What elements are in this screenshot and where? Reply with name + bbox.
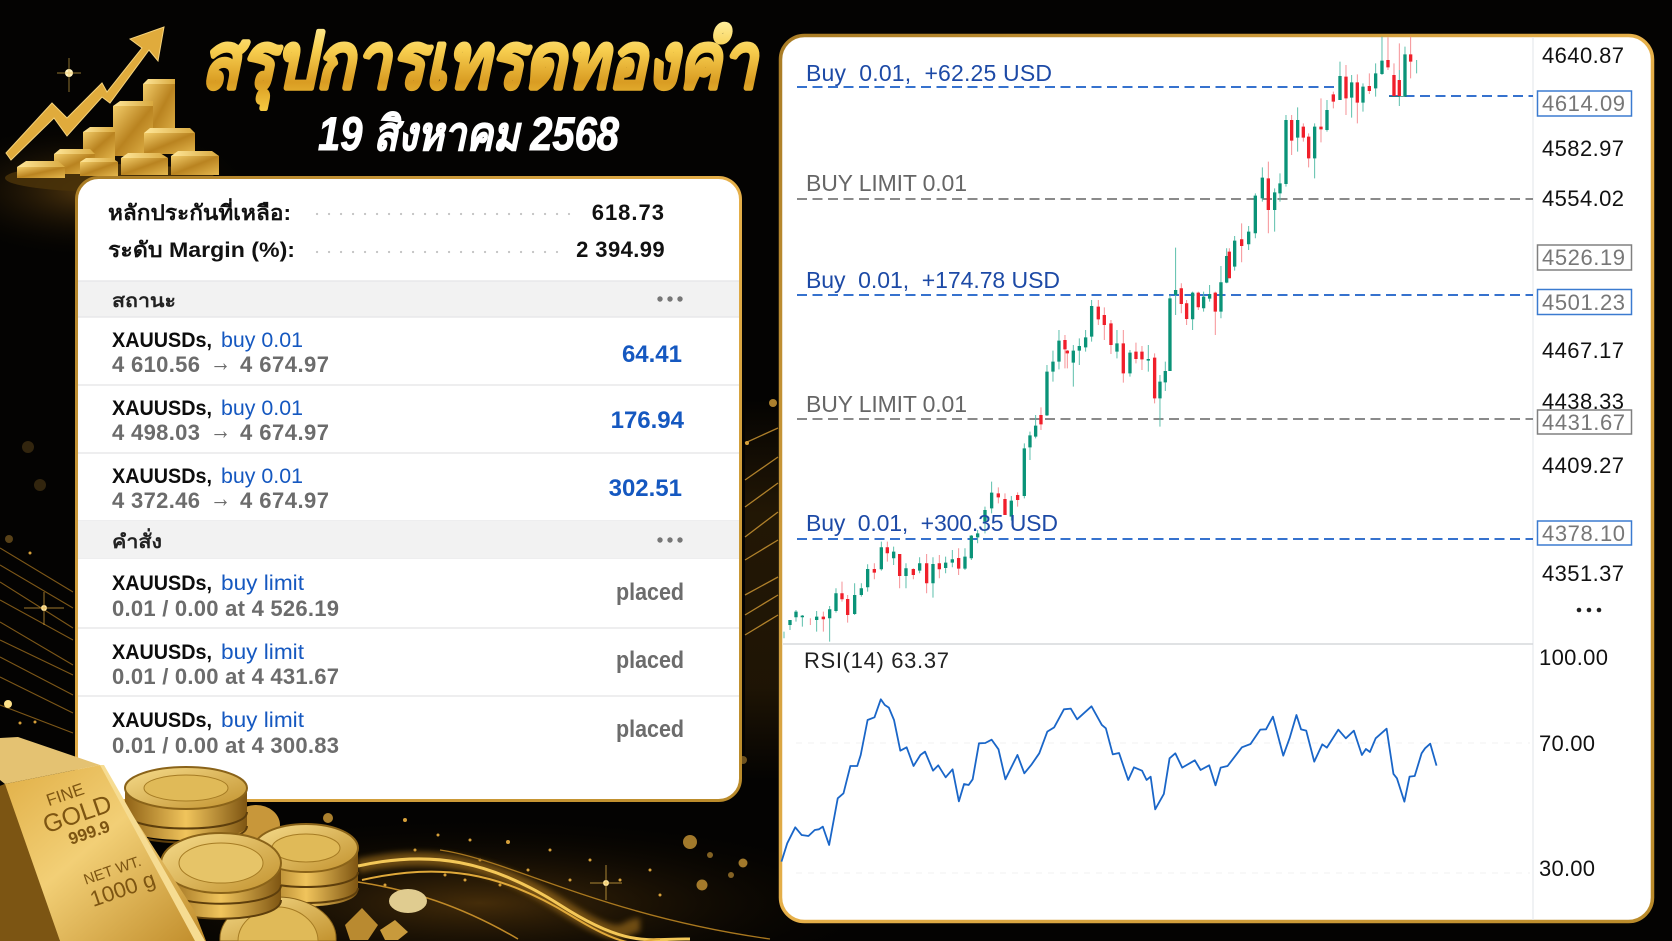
price tag 4431.67: 4431.67 — [1542, 410, 1625, 435]
panel: price chart — [780, 36, 1652, 922]
label: buy limit upper: BUY LIMIT 0.01 — [806, 170, 967, 196]
order row 2: buy limit — [221, 641, 304, 664]
position row 2: 4 498.03 — [112, 420, 200, 445]
order row 1: XAUUSDs, — [112, 572, 212, 595]
illustration: large gold bar and coins — [0, 737, 427, 941]
equity row: หลักประกันที่เหลือ: — [108, 197, 291, 225]
position row 1: buy 0.01 — [221, 329, 303, 352]
icon: stack of gold bars — [5, 79, 219, 192]
position row 2: → — [210, 415, 231, 445]
sparkles and bokeh — [4, 58, 777, 900]
price axis labels: 4438.33 — [1542, 389, 1624, 414]
price axis labels: 4582.97 — [1542, 136, 1624, 161]
label: buy limit lower: BUY LIMIT 0.01 — [806, 391, 967, 417]
position row 2: 176.94 — [611, 407, 685, 434]
position row 3: buy 0.01 — [221, 465, 303, 488]
RSI axis labels — [1539, 645, 1608, 881]
margin row: 2 394.99 — [576, 237, 665, 262]
gold wave — [358, 850, 770, 941]
order row 2: placed — [616, 647, 684, 674]
price tag 4501.23: 4501.23 — [1542, 290, 1625, 315]
bar engraving: FINE — [44, 780, 87, 810]
equity row — [108, 197, 665, 225]
level lines — [797, 87, 1533, 539]
subtitle: date: 19 สิงหาคม 2568 — [318, 107, 620, 160]
gold bar — [0, 737, 206, 941]
title: สรุปการเทรดทองคำ — [201, 17, 760, 110]
coin stack right — [254, 824, 358, 906]
panel: account and orders — [76, 178, 740, 800]
position row 3 — [112, 465, 682, 513]
position row 1: 4 674.97 — [240, 352, 329, 377]
coin stack front — [161, 833, 281, 919]
bar engraving: NET WT. — [82, 853, 144, 889]
order row 1 — [112, 572, 684, 621]
equity row: 618.73 — [592, 200, 665, 225]
position row 3: 302.51 — [609, 475, 682, 502]
position row 1: XAUUSDs, — [112, 329, 212, 352]
position row 3: 4 372.46 — [112, 488, 200, 513]
candlestick chart — [784, 37, 1417, 642]
RSI label: RSI(14) 63.37 — [804, 648, 949, 673]
price axis labels — [1542, 43, 1624, 586]
order row 3 — [112, 709, 684, 758]
section header: orders: คำสั่ง — [112, 528, 162, 553]
label: buy +62.25: Buy 0.01, +62.25 USD — [806, 60, 1052, 86]
position row 2 — [112, 397, 685, 445]
order row 3: placed — [616, 716, 684, 743]
label: buy +174.78: Buy 0.01, +174.78 USD — [806, 267, 1060, 293]
price tag 4378.10: 4378.10 — [1542, 521, 1625, 546]
bar engraving: 999.9 — [66, 817, 112, 849]
order row 2: 0.01 / 0.00 at 4 431.67 — [112, 664, 339, 689]
RSI axis labels: 100.00 — [1539, 645, 1608, 670]
position row 2: XAUUSDs, — [112, 397, 212, 420]
section header: positions — [78, 281, 739, 317]
coin bottom — [220, 897, 336, 941]
price axis labels: 4409.27 — [1542, 453, 1624, 478]
position row 3: → — [210, 483, 231, 513]
RSI axis labels: 30.00 — [1539, 856, 1595, 881]
gold streaks left — [0, 548, 73, 733]
margin row: ระดับ Margin (%): — [108, 239, 295, 262]
price axis labels: 4640.87 — [1542, 43, 1624, 68]
gold streaks centre — [745, 428, 778, 635]
RSI line chart — [781, 699, 1437, 862]
price tag 4526.19: 4526.19 — [1542, 245, 1625, 270]
section header: orders — [78, 521, 739, 558]
position row 1: 4 610.56 — [112, 352, 200, 377]
gold nuggets — [345, 889, 427, 940]
coin stack rear — [125, 767, 280, 845]
position row 1: → — [210, 347, 231, 377]
position row 2: buy 0.01 — [221, 397, 303, 420]
position row 1: 64.41 — [622, 341, 682, 368]
order row 2 — [112, 641, 684, 689]
position row 3: XAUUSDs, — [112, 465, 212, 488]
more menu dots — [1577, 608, 1601, 612]
bar engraving: 1000 g — [87, 866, 158, 912]
price tag 4614.09: 4614.09 — [1542, 91, 1625, 116]
section header: positions: สถานะ — [112, 291, 176, 312]
price axis labels: 4554.02 — [1542, 186, 1624, 211]
position row 2: 4 674.97 — [240, 420, 329, 445]
label: buy +300.35: Buy 0.01, +300.35 USD — [806, 510, 1058, 536]
bar engraving — [39, 780, 158, 912]
price axis labels: 4467.17 — [1542, 338, 1624, 363]
icon: rising gold arrow — [6, 27, 164, 160]
RSI axis labels: 70.00 — [1539, 731, 1595, 756]
order row 1: placed — [616, 579, 684, 606]
order row 2: XAUUSDs, — [112, 641, 212, 664]
position row 3: 4 674.97 — [240, 488, 329, 513]
axis and dividers — [1532, 37, 1534, 920]
position row 1 — [112, 329, 682, 377]
order row 3: XAUUSDs, — [112, 709, 212, 732]
price axis labels: 4351.37 — [1542, 561, 1624, 586]
margin row — [108, 237, 665, 262]
order row 3: 0.01 / 0.00 at 4 300.83 — [112, 733, 339, 758]
order row 1: 0.01 / 0.00 at 4 526.19 — [112, 596, 339, 621]
bar engraving: GOLD — [39, 790, 115, 839]
order row 3: buy limit — [221, 709, 304, 732]
order row 1: buy limit — [221, 572, 304, 595]
